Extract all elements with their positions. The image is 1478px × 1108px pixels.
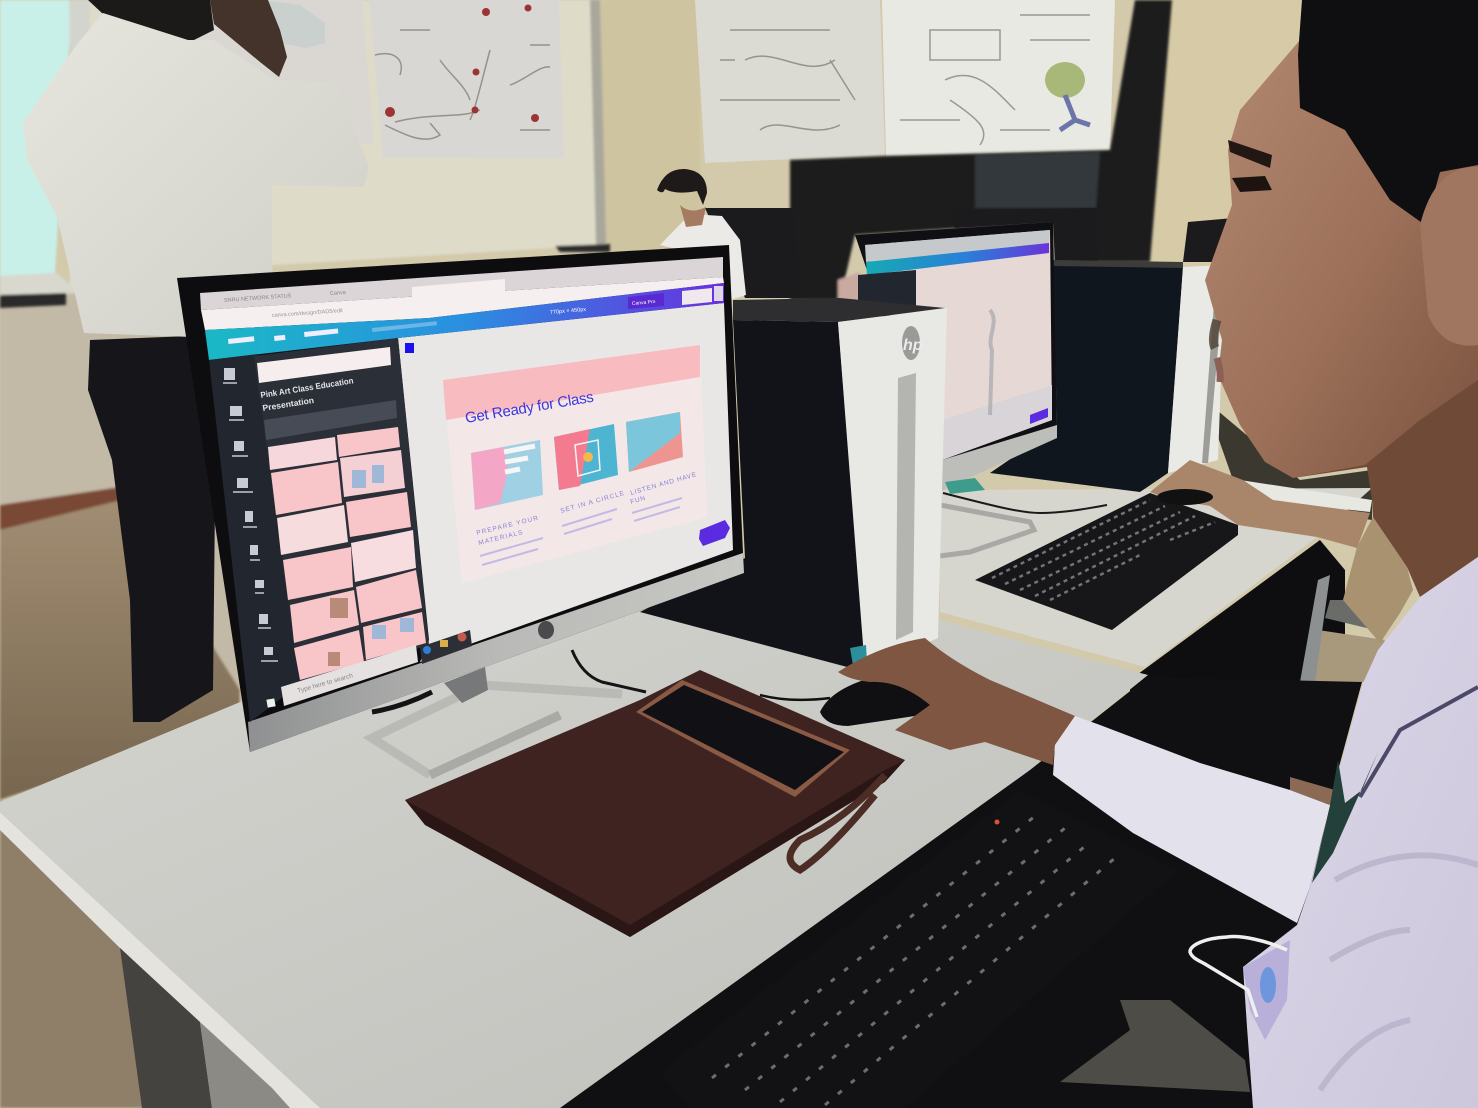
- second desk: [940, 488, 1372, 667]
- slide image one: [471, 440, 543, 510]
- second student's hand and sweater: [1150, 460, 1413, 643]
- leather portfolio: [405, 670, 905, 937]
- slide image two: [554, 424, 618, 490]
- moustache shadow: [1213, 320, 1217, 348]
- left tool rail: [209, 354, 300, 722]
- bottle: [262, 0, 325, 48]
- forearm and hand: [1150, 460, 1370, 548]
- template side panel: Presentation: [262, 395, 315, 413]
- presentation slide: [443, 345, 707, 583]
- use-all-pages button: [264, 400, 397, 440]
- neck: [1293, 350, 1478, 597]
- smartphone: [636, 680, 850, 797]
- lips: [1217, 358, 1220, 382]
- sweater cuff: [1343, 517, 1413, 643]
- posters on wall: [190, 0, 1115, 163]
- canva header bar: 770px × 450px: [550, 307, 587, 316]
- second computer tower: [990, 260, 1225, 492]
- wrist strap: [790, 775, 885, 870]
- hp logo: [538, 621, 554, 639]
- shirt folds: [1320, 855, 1478, 1090]
- collar outline: [1360, 687, 1478, 797]
- hp logo: [902, 326, 923, 360]
- monitor body: [177, 245, 744, 752]
- shirt body: [1243, 557, 1478, 1108]
- right monitor stand and cables: [940, 505, 1034, 556]
- template side panel: [254, 338, 429, 684]
- face: [1205, 20, 1478, 478]
- main desk: [0, 612, 1148, 1108]
- door and dark column: [790, 0, 1172, 305]
- main hand on mouse: [838, 638, 1075, 765]
- seated person in background: [657, 169, 746, 300]
- panel search box: [257, 347, 391, 383]
- white shirt: [23, 13, 369, 340]
- hp logo: hp: [903, 337, 923, 354]
- dark frame under second desk: [1130, 400, 1385, 740]
- slide caption body lines: [480, 498, 682, 565]
- slide captions: MATERIALS: [478, 529, 524, 547]
- canva header bar: [205, 283, 724, 360]
- lanyard: [1312, 752, 1378, 883]
- head seen from behind: [88, 0, 214, 42]
- toolbar colour swatch: [405, 343, 414, 353]
- windows start icon: [266, 698, 276, 708]
- main keyboard: [660, 790, 1178, 1108]
- standing man: [23, 0, 369, 722]
- browser address bar: canva.com/design/DAD5/edit: [272, 308, 343, 319]
- windows taskbar: Type here to search: [297, 672, 354, 695]
- mouse: [1157, 489, 1213, 505]
- slide captions: LISTEN AND HAVE: [630, 471, 698, 497]
- windows taskbar: [281, 630, 472, 706]
- slide image three: [626, 412, 683, 472]
- browser address bar: [201, 277, 724, 330]
- browser tab strip: SNRU NETWORK STATUS: [224, 293, 292, 304]
- main monitor: [177, 245, 744, 752]
- main monitor stand: [372, 650, 646, 775]
- keyboard on second desk: [975, 493, 1238, 630]
- ear: [1420, 167, 1478, 346]
- canva header bar: Canva Pro: [632, 299, 656, 307]
- hair: [1298, 0, 1478, 225]
- slide title: Get Ready for Class: [464, 389, 595, 427]
- slide captions: PREPARE YOUR: [476, 515, 540, 537]
- projection screen and whiteboard: [0, 0, 610, 308]
- browser tab strip: [200, 257, 723, 310]
- slide captions: SET IN A CIRCLE: [560, 490, 626, 515]
- trousers: [88, 336, 215, 722]
- slide captions: [476, 471, 698, 547]
- foreground student: [1053, 0, 1478, 1108]
- eye: [1232, 176, 1272, 192]
- silver lower bezel: [248, 553, 744, 752]
- mouse and cable: [760, 678, 934, 726]
- chairs behind: [705, 208, 1245, 298]
- white shelf behind forearm: [1240, 480, 1372, 512]
- help button: [699, 520, 730, 546]
- right monitor: [855, 222, 1107, 556]
- slide captions: FUN: [630, 495, 647, 506]
- main computer tower: [640, 298, 947, 672]
- face mask straps: [1190, 937, 1287, 1017]
- right monitor screen: [865, 230, 1052, 460]
- eyebrow: [1228, 140, 1272, 168]
- panel title: Pink Art Class Education: [260, 375, 354, 400]
- dark space under desks: [560, 677, 1362, 1108]
- browser tab strip: Canva: [330, 290, 347, 297]
- poster figure: [1045, 62, 1090, 130]
- pocket with blue mask: [1243, 940, 1290, 1040]
- shirt sleeve: [1053, 716, 1330, 923]
- desk leg and edge: [0, 812, 320, 1108]
- right monitor bezel: [942, 425, 1057, 490]
- canvas workspace: [398, 303, 733, 662]
- arm and hand: [210, 0, 287, 77]
- template thumbnails: [268, 427, 426, 680]
